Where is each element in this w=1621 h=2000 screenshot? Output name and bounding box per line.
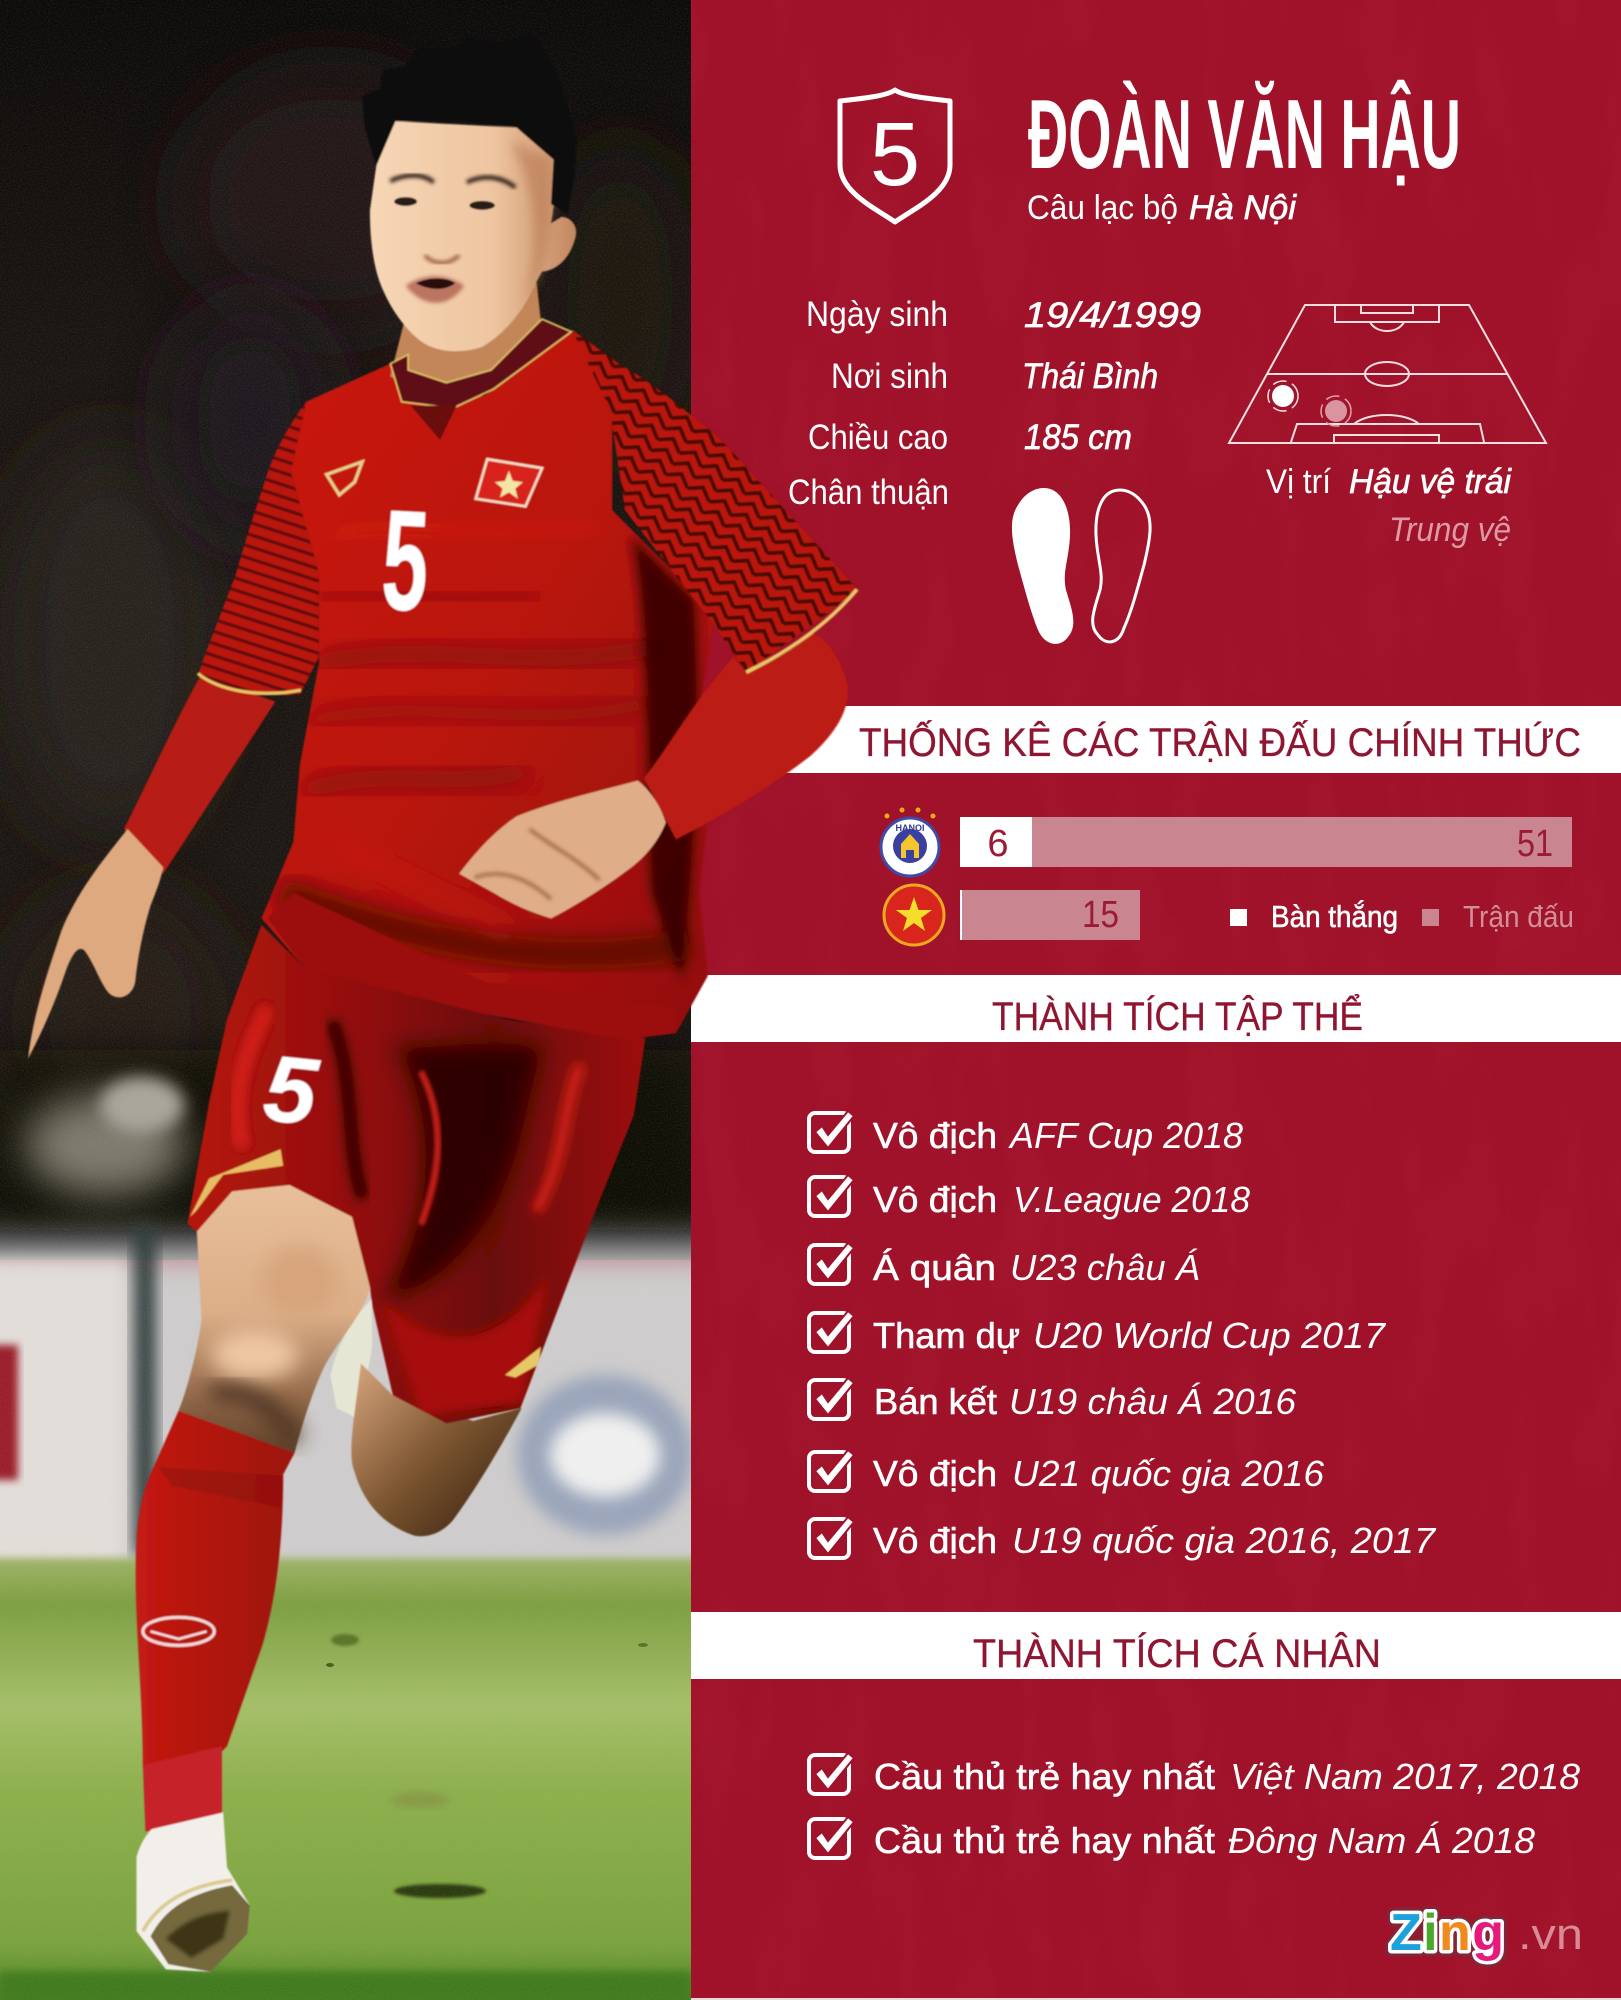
profile labels [788, 295, 949, 512]
profile values: 19/4/1999 [1024, 296, 1201, 335]
logo: Zing.vn: Zing [1390, 1904, 1504, 1962]
item 6: U21 quốc gia 2016 [1012, 1453, 1325, 1494]
photo background: stadium [0, 0, 691, 2000]
item 1: Cầu thủ trẻ hay nhất [874, 1756, 1215, 1797]
item 3 [809, 1243, 1200, 1288]
secondary position marker [1321, 396, 1351, 426]
front boot [136, 1812, 250, 1972]
position text [1266, 463, 1512, 549]
bar: national team: 15 [1082, 894, 1119, 936]
position text: Trung vệ [1389, 511, 1511, 549]
hair [362, 36, 577, 214]
item 6 [809, 1450, 1325, 1494]
legend [1230, 899, 1574, 934]
item 2 [809, 1175, 1250, 1220]
item 5: U19 châu Á 2016 [1009, 1381, 1297, 1422]
face [370, 121, 576, 351]
left sleeve [198, 402, 319, 695]
item 7 [809, 1517, 1437, 1561]
item 4 [809, 1311, 1387, 1356]
right sleeve [571, 329, 857, 672]
profile labels: Chiều cao [808, 418, 948, 457]
item 2: Cầu thủ trẻ hay nhất [874, 1820, 1215, 1861]
left forearm [124, 676, 276, 874]
panel: red background [691, 0, 1621, 2000]
club subtitle: Câu lạc bộ [1027, 189, 1178, 227]
item 1: AFF Cup 2018 [1008, 1115, 1243, 1156]
profile labels: Ngày sinh [806, 295, 948, 334]
item 3: U23 châu Á [1010, 1247, 1200, 1288]
item 1 [809, 1111, 1243, 1156]
shirt number shield [840, 90, 950, 222]
bar: national team [960, 890, 1140, 940]
item 2: Đông Nam Á 2018 [1228, 1820, 1535, 1861]
position text: Hậu vệ trái [1349, 463, 1512, 501]
heading: statistics: THỐNG KÊ CÁC TRẬN ĐẤU CHÍNH THỨC [859, 719, 1581, 765]
item 5 [809, 1378, 1297, 1422]
icon: preferred foot [1012, 488, 1150, 644]
icon: Hanoi FC crest: HANOI [896, 823, 924, 833]
shorts [179, 918, 663, 1441]
section bar: individual achievements [691, 1612, 1621, 1679]
section bar: team achievements [691, 975, 1621, 1042]
profile labels: Nơi sinh [831, 357, 948, 396]
item 7: U19 quốc gia 2016, 2017 [1012, 1520, 1437, 1561]
heading: team achievements: THÀNH TÍCH TẬP THỂ [992, 992, 1363, 1039]
photo: player figure [28, 36, 857, 1972]
item 3: Á quân [873, 1247, 996, 1288]
shirt number shield: 5 [870, 105, 920, 205]
club subtitle [1027, 189, 1297, 227]
item 7: Vô địch [873, 1520, 997, 1561]
profile labels: Chân thuận [788, 473, 949, 512]
item 2: Vô địch [873, 1179, 997, 1220]
legend: Trận đấu [1463, 899, 1574, 934]
neck [390, 274, 542, 408]
item 2 [809, 1817, 1535, 1861]
logo: Zing.vn: Zing [1390, 1904, 1504, 1962]
item 6: Vô địch [873, 1453, 997, 1494]
position text: Vị trí [1266, 463, 1332, 501]
bar: club: 51 [1517, 823, 1553, 865]
legend: Bàn thắng [1271, 899, 1398, 934]
jersey flag [476, 459, 542, 506]
icon: Vietnam crest [884, 885, 944, 945]
team achievements list [809, 1111, 1437, 1561]
logo: Zing.vn: .vn [1518, 1910, 1583, 1959]
logo: Zing.vn [1390, 1904, 1583, 1962]
item 4: U20 World Cup 2017 [1033, 1315, 1387, 1356]
jersey number: 5 [378, 481, 432, 642]
item 1: Vô địch [873, 1115, 997, 1156]
right hand [459, 781, 666, 918]
sock [136, 1411, 295, 1832]
item 1: Việt Nam 2017, 2018 [1230, 1756, 1580, 1797]
profile values: 185 cm [1024, 418, 1132, 457]
item 1 [809, 1753, 1580, 1797]
section bar: statistics [691, 706, 1621, 773]
profile values [1022, 296, 1201, 457]
profile values: Thái Bình [1022, 357, 1158, 396]
shorts number: 5 [259, 1036, 324, 1146]
right forearm [644, 634, 848, 839]
left hand [28, 829, 163, 1059]
collar [390, 319, 571, 408]
main position marker [1268, 381, 1298, 411]
heading: individual achievements: THÀNH TÍCH CÁ NHÂN [973, 1631, 1381, 1676]
back leg [351, 1364, 522, 1536]
jersey body [260, 332, 713, 1038]
item 2: V.League 2018 [1013, 1179, 1250, 1220]
back boot [330, 1300, 372, 1417]
bar: club: 6 [987, 823, 1009, 865]
item 5: Bán kết [874, 1381, 997, 1422]
individual achievements list [809, 1753, 1580, 1861]
jersey logo [327, 462, 362, 495]
item 4: Tham dự [873, 1315, 1020, 1356]
icon: Hanoi FC crest [881, 808, 939, 876]
pitch position diagram [1229, 305, 1546, 443]
front thigh [179, 1173, 370, 1453]
bar: club [960, 817, 1572, 867]
club subtitle: Hà Nội [1189, 189, 1297, 227]
